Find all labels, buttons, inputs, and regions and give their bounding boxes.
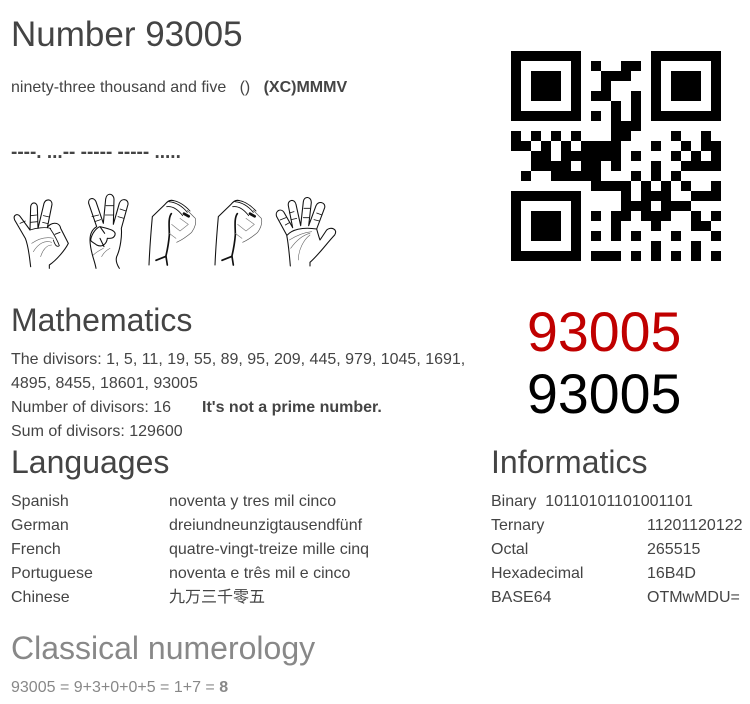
heading: classical numerology: Classical numerology	[11, 630, 315, 666]
divisors text: Sum of divisors: 129600	[11, 423, 183, 440]
divisors text: 4895, 8455, 18601, 93005	[11, 375, 198, 392]
numerology calculation: 93005 = 9+3+0+0+5 = 1+7 = 8	[11, 679, 228, 696]
QR code	[511, 51, 721, 261]
informatics table: 265515	[647, 541, 700, 558]
icon: sign language hands	[14, 194, 336, 269]
informatics table: OTMwMDU=	[647, 589, 740, 606]
languages table: 九万三千零五	[169, 589, 265, 606]
languages table: noventa e três mil e cinco	[169, 565, 350, 582]
informatics table: BASE64	[491, 589, 551, 606]
heading: informatics: Informatics	[491, 444, 647, 480]
languages table: Chinese	[11, 589, 70, 606]
languages table: noventa y tres mil cinco	[169, 493, 336, 510]
languages table: French	[11, 541, 61, 558]
divisors text: It's not a prime number.	[202, 399, 382, 416]
informatics table: Binary 10110101101001101	[491, 493, 693, 510]
morse code: ----. ...-- ----- ----- .....	[11, 142, 181, 163]
informatics table: Ternary	[491, 517, 544, 534]
large black number: 93005	[527, 363, 681, 425]
divisors text: The divisors: 1, 5, 11, 19, 55, 89, 95, 209, 445, 979, 1045, 1691,	[11, 351, 465, 368]
heading: mathematics: Mathematics	[11, 302, 192, 338]
informatics table: Hexadecimal	[491, 565, 583, 582]
title: Number 93005	[11, 15, 243, 54]
heading: languages: Languages	[11, 444, 169, 480]
large red number: 93005	[527, 301, 681, 363]
languages table: quatre-vingt-treize mille cinq	[169, 541, 369, 558]
divisors text	[11, 351, 465, 440]
informatics table	[491, 493, 743, 606]
informatics table: 16B4D	[647, 565, 696, 582]
languages table: dreiundneunzigtausendfünf	[169, 517, 362, 534]
divisors text: Number of divisors: 16	[11, 399, 171, 416]
languages table: Spanish	[11, 493, 69, 510]
languages table: Portuguese	[11, 565, 93, 582]
languages table: German	[11, 517, 69, 534]
informatics table: 11201120122	[647, 517, 743, 534]
number in words and roman numeral: ninety-three thousand and five () (XC)MMMV	[11, 79, 347, 96]
languages table	[11, 493, 369, 606]
informatics table: Octal	[491, 541, 528, 558]
